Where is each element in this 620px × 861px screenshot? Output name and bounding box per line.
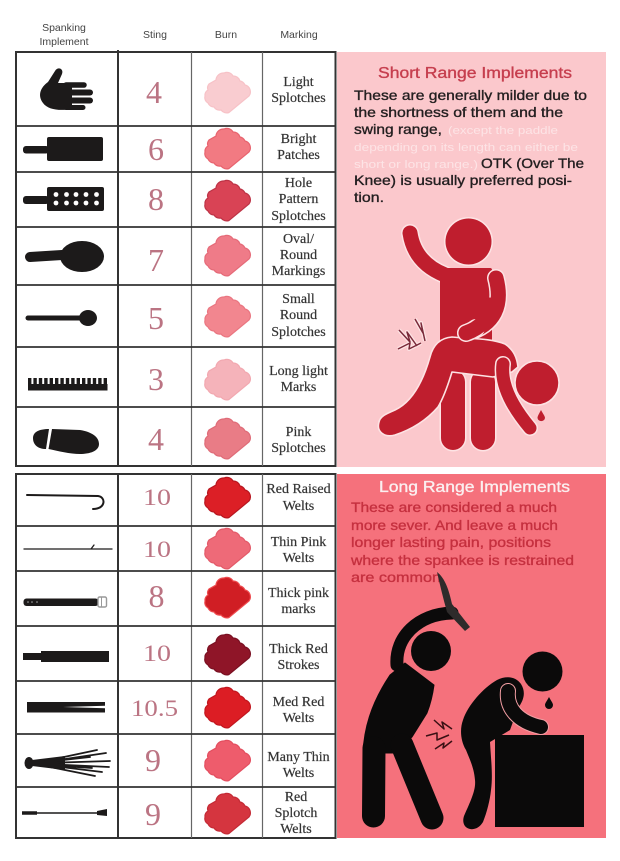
marking text: Welts [283,499,314,514]
panel: short range implements [337,52,606,467]
marking text: Pattern [279,192,318,207]
marking text: Patches [277,148,320,163]
marking text: Marks [281,380,316,395]
icon: cane [27,495,103,509]
icon: split tawse [27,702,105,712]
burn swatch [205,128,250,169]
burn swatch [205,418,250,459]
marking text: Welts [283,551,314,566]
marking text: Welts [280,822,312,837]
marking text: Many Thin [267,750,330,765]
burn swatch [205,528,250,569]
row: paddle [23,128,320,169]
icon: strap [23,651,109,662]
sting value: 10.5 [131,696,178,721]
text block: long range description [350,499,574,585]
marking text: Small [282,292,315,307]
text block: short range description: These are generally milder due to [354,87,587,103]
sting value: 5 [148,300,164,336]
marking text: Thick pink [268,586,329,601]
marking text: marks [281,602,316,617]
marking text: Hole [285,176,312,191]
burn swatch [205,687,250,728]
marking text: Long light [269,364,328,379]
strap in raised hand [437,572,470,631]
marking text: Red [285,790,307,805]
row: riding crop [22,790,317,837]
marking text: Thin Pink [271,535,326,550]
icon: thin switch [24,545,112,549]
marking text: Round [280,248,317,263]
icon: belt [24,597,106,607]
icon: hand [40,68,90,110]
marking text: Red Raised [266,482,331,497]
lying figure head [515,361,559,405]
icon: spoon [28,310,97,326]
row: strap [23,634,328,675]
row: hairbrush [30,232,325,279]
icon: riding crop [22,809,107,816]
sting value: 7 [148,242,164,278]
marking text: Med Red [273,695,324,710]
marking text: Round [280,308,317,323]
row: belt [24,577,329,618]
text block: long range description: are common [351,569,441,585]
standing figure [363,613,452,818]
seated hand over lying figure [466,328,476,333]
column headers [39,22,318,48]
icon: flogger [24,750,110,776]
icon: paddle [23,137,103,161]
icon: black standing and bent-over pictograms [363,572,584,829]
text block: long range description: more sever. And leave a much [351,517,558,533]
burn swatch [205,235,250,276]
icon: slipper sole [33,429,99,454]
sting value: 9 [145,796,161,832]
marking text: Markings [272,264,325,279]
row: ruler [28,359,328,400]
marking text: Welts [283,711,314,726]
panel: long range implements [337,474,606,838]
tear drop [538,410,545,421]
icon: holed paddle [23,187,104,211]
text block: short range description: Knee) is usually preferred posi- [354,172,572,188]
tear drop [545,697,553,709]
burn swatch [205,359,250,400]
marking text: Splotches [271,209,326,224]
bent-over head [522,652,562,692]
marking text: Oval/ [283,232,314,247]
text block: short range description: the shortness of them and the [354,104,563,120]
row: tawse [27,687,324,728]
icon: ruler [28,381,108,390]
header: spanking implement: Implement [39,36,89,48]
text block: short range description: swing range, [354,121,442,137]
sting value: 3 [148,361,164,397]
row: slipper [33,418,326,459]
seated arm [466,278,498,333]
marking text: Light [283,75,314,90]
row: cane [27,477,331,518]
row: spoon [28,292,326,340]
bent-over figure [461,677,524,829]
header: burn: Burn [215,29,237,41]
marking text: Pink [286,425,311,440]
burn swatch [205,793,250,834]
header: sting: Sting [143,29,167,41]
burn swatch [205,72,250,113]
burn swatch [205,577,250,618]
icon: red over-the-knee pictogram [378,218,559,438]
text block: short range description: OTK (Over The [481,155,584,171]
pain bolts [398,319,425,349]
header: marking: Marking [280,29,318,41]
marking text: Splotches [271,441,326,456]
text block: short range description: short or long range.) [354,159,478,171]
burn swatch [205,477,250,518]
sting value: 9 [145,742,161,778]
header: spanking implement: Spanking [42,22,86,34]
marking text: Thick Red [269,642,328,657]
marking text: Bright [281,132,316,147]
text block: short range description [354,87,587,205]
text block: short range description: (except the paddle [448,125,558,137]
burn swatch [205,296,250,337]
marking text: Splotches [271,91,326,106]
seated figure outline [410,218,492,438]
marking text: Splotch [275,806,317,821]
pain bolts [426,720,452,749]
sting value: 6 [148,131,164,167]
marking text: Welts [283,766,314,781]
text block: short range description: depending on its length can either be [354,142,578,154]
bent-over figure arm [508,691,541,727]
heading: long range: Long Range Implements [379,479,570,496]
box [495,735,584,827]
sting value: 8 [148,578,164,614]
sting value: 10 [143,537,171,562]
sting value: 10 [143,641,171,666]
burn swatch [205,180,250,221]
lying figure body and leg [378,337,518,436]
lying figure hanging arm [503,364,530,428]
text block: short range description: tion. [354,189,384,205]
marking text: Splotches [271,325,326,340]
text block: long range description: These are considered a much [351,499,557,515]
burn swatch [205,634,250,675]
text block: long range description: where the spankee is restrained [350,552,574,568]
table: short range implements [16,50,336,466]
row: switch [24,528,326,569]
table: long range implements [16,474,336,838]
sting value: 4 [146,74,162,110]
icon: hairbrush [30,241,104,272]
sting value: 10 [143,485,171,510]
marking text: Strokes [278,658,320,673]
sting value: 8 [148,181,164,217]
row: flogger [24,740,330,781]
seated figure [410,218,492,438]
heading: short range: Short Range Implements [378,65,572,82]
row: holed paddle [23,176,326,224]
sting value: 4 [148,421,164,457]
row: hand [40,68,326,113]
burn swatch [205,740,250,781]
text block: long range description: longer lasting pain, positions [351,534,551,550]
